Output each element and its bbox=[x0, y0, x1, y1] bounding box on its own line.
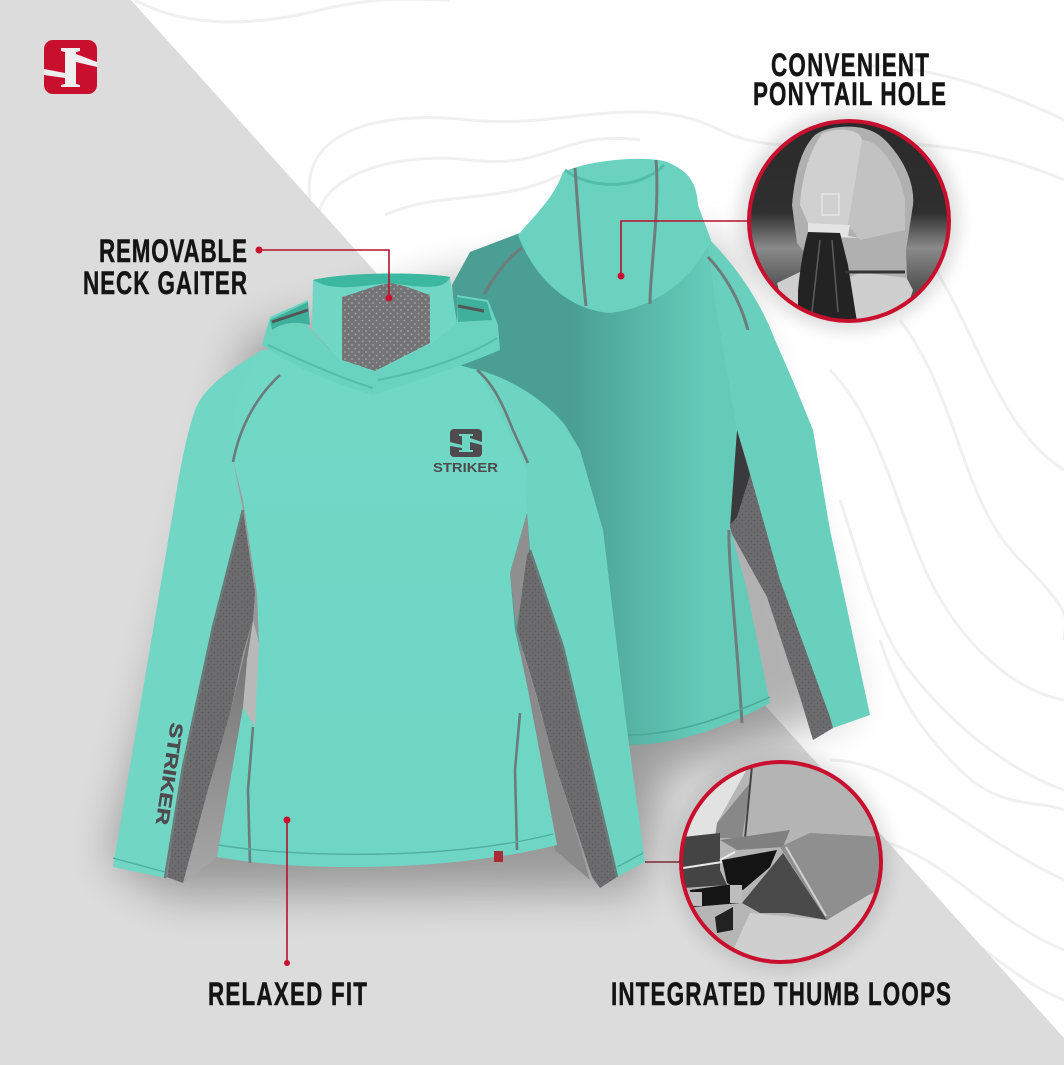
logo bbox=[44, 40, 97, 94]
chest logo bbox=[433, 429, 499, 475]
label: convenient ponytail hole bbox=[753, 47, 946, 112]
photo ring bbox=[681, 762, 881, 962]
gaiter mesh panel bbox=[342, 283, 430, 371]
front view hoodie bbox=[113, 274, 645, 888]
left mesh panel bbox=[167, 510, 255, 883]
photo ring bbox=[749, 121, 949, 321]
back sleeve bbox=[708, 238, 870, 728]
back hood bbox=[518, 159, 711, 313]
label: removable neck gaiter: NECK GAITER bbox=[83, 265, 247, 301]
label: removable neck gaiter: REMOVABLE bbox=[99, 233, 247, 269]
label: integrated thumb loops: INTEGRATED THUMB LOOPS bbox=[611, 976, 951, 1012]
back body bbox=[452, 200, 770, 745]
right sleeve bbox=[478, 370, 645, 877]
photo circle: ponytail hole bbox=[739, 111, 959, 331]
front body bbox=[217, 350, 557, 867]
right shadow wedge bbox=[515, 625, 590, 880]
back view hoodie bbox=[452, 159, 870, 745]
shirt shadows bbox=[110, 240, 850, 895]
leader: removable neck gaiter bbox=[256, 246, 392, 302]
left sleeve bbox=[113, 350, 262, 878]
left inner light panel bbox=[243, 620, 259, 727]
chest logo wordmark: STRIKER bbox=[433, 460, 499, 475]
label: removable neck gaiter bbox=[83, 233, 247, 301]
leader: ponytail hole bbox=[618, 221, 749, 280]
label: convenient ponytail hole: PONYTAIL HOLE bbox=[753, 76, 946, 112]
front seams bbox=[165, 370, 617, 878]
sleeve wordmark: STRIKER bbox=[152, 721, 187, 826]
back mesh panel bbox=[728, 430, 833, 740]
left wedge of shadow bbox=[183, 620, 258, 883]
neck gaiter bbox=[312, 274, 457, 371]
label: relaxed fit: RELAXED FIT bbox=[208, 976, 367, 1012]
leader: thumb loops bbox=[645, 861, 681, 863]
label: convenient ponytail hole: CONVENIENT bbox=[771, 47, 929, 83]
back seams bbox=[484, 160, 748, 723]
hem tag bbox=[494, 851, 503, 862]
photo circle: thumb loops bbox=[671, 752, 891, 972]
right inner light panel bbox=[510, 513, 530, 628]
right mesh panel bbox=[517, 550, 617, 888]
hood bbox=[262, 295, 500, 395]
leader: relaxed fit bbox=[284, 816, 290, 966]
